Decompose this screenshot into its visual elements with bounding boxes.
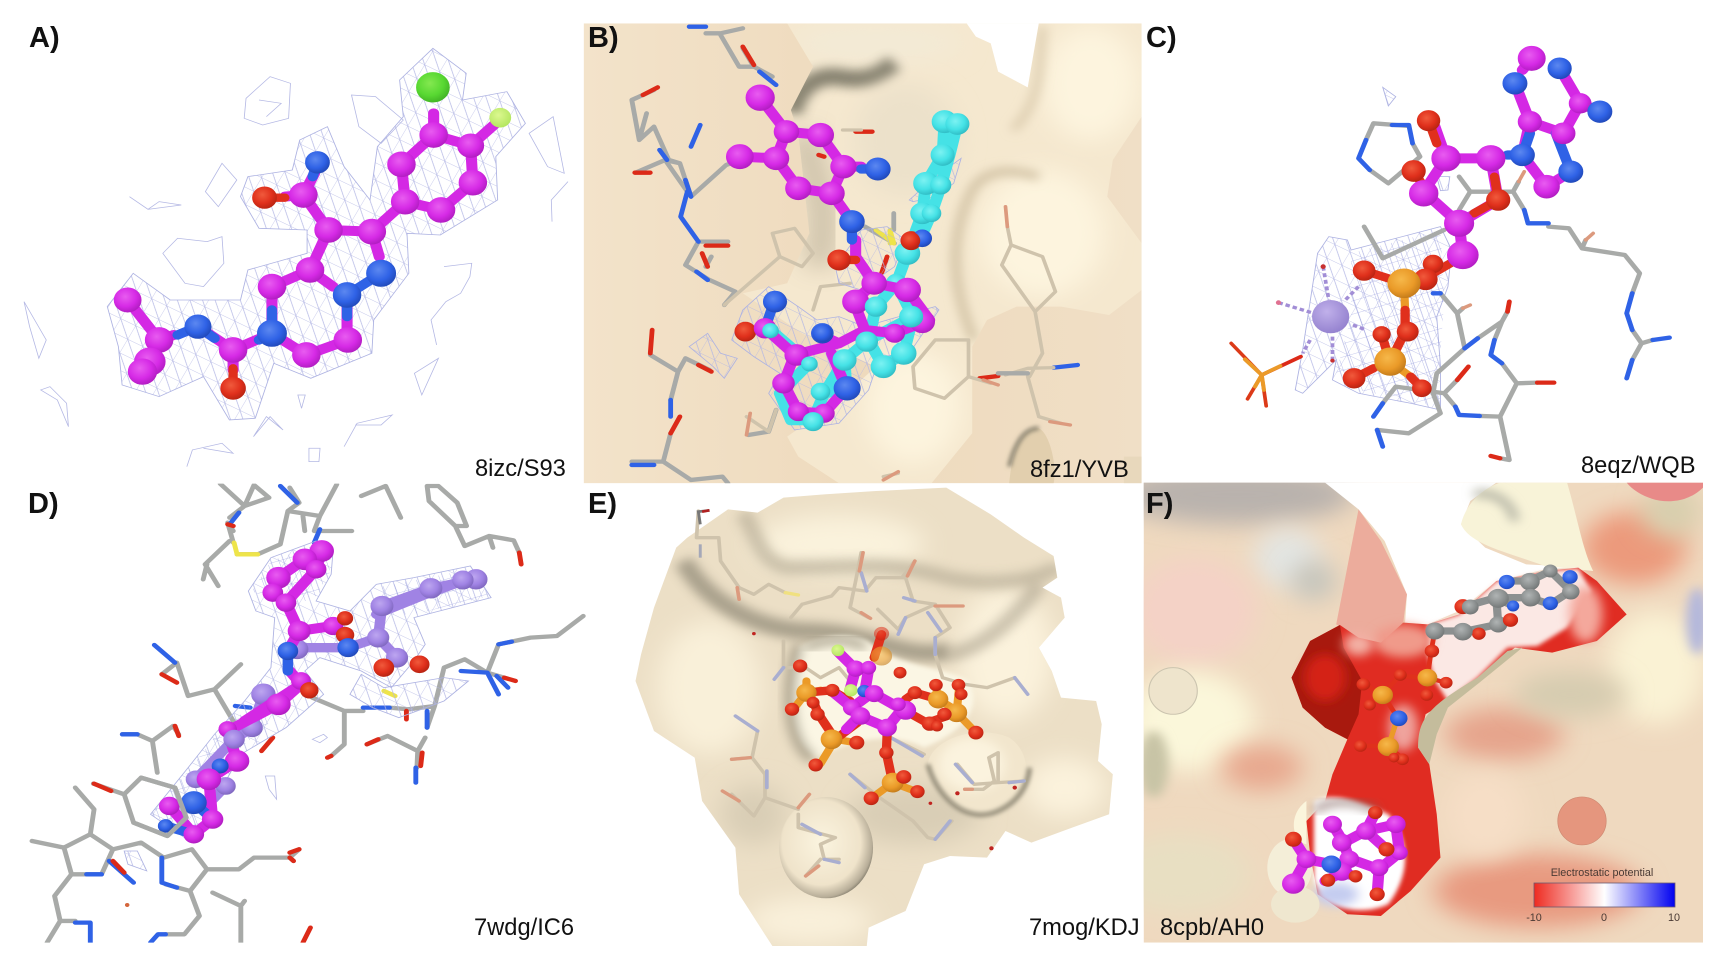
panel caption E: 7mog/KDJ bbox=[1029, 915, 1140, 941]
white pocket base bbox=[1314, 797, 1405, 910]
panel label D: D) bbox=[28, 488, 59, 520]
panel C: 8eqz/WQB nucleotide with metal bbox=[1146, 22, 1696, 479]
panel B: 8fz1/YVB overlay in surface pocket bbox=[580, 20, 1146, 487]
density mesh B bbox=[689, 158, 961, 430]
density mesh A bbox=[24, 48, 568, 467]
ligand C bbox=[1403, 47, 1611, 268]
cyan ligand front atoms B bbox=[764, 231, 930, 430]
panel label A: A) bbox=[29, 22, 60, 54]
electrostatic potential legend: -10 bbox=[1526, 912, 1542, 924]
density mesh D bbox=[124, 541, 491, 871]
blown-out gap behind ligand bbox=[1325, 483, 1578, 624]
ligand E bbox=[786, 628, 983, 804]
water dots E bbox=[752, 632, 1017, 850]
phosphate and metal C bbox=[1276, 256, 1459, 396]
ligand atoms A bbox=[115, 74, 509, 398]
free phosphate C bbox=[1231, 343, 1301, 406]
electrostatic surface F bbox=[1144, 482, 1703, 942]
panel caption F: 8cpb/AH0 bbox=[1160, 915, 1264, 941]
panel F: 8cpb/AH0 electrostatic surface bbox=[1144, 482, 1703, 942]
panel label E: E) bbox=[588, 488, 617, 520]
panel label F: F) bbox=[1146, 488, 1173, 520]
panel caption B: 8fz1/YVB bbox=[1030, 457, 1129, 483]
background wall B bbox=[584, 23, 1142, 483]
panel E: 7mog/KDJ in surface pocket bbox=[588, 488, 1140, 946]
magenta ligand D bbox=[125, 542, 428, 907]
red pocket bbox=[1292, 568, 1627, 916]
panel caption C: 8eqz/WQB bbox=[1581, 453, 1696, 479]
panel label C: C) bbox=[1146, 22, 1177, 54]
panel label B: B) bbox=[588, 22, 619, 54]
molecular surface B bbox=[744, 24, 1142, 484]
magenta ligand F bbox=[1283, 807, 1407, 900]
panel D: 7wdg/IC6 two ligand copies in density bbox=[28, 484, 583, 943]
electrostatic potential legend: Electrostatic potential bbox=[1551, 867, 1653, 879]
density mesh C bbox=[1295, 87, 1452, 410]
molecular surface E bbox=[636, 488, 1113, 946]
ATP-like ligand F bbox=[1355, 565, 1579, 764]
electrostatic potential legend: 10 bbox=[1668, 912, 1680, 924]
electrostatic potential legend: 0 bbox=[1601, 912, 1607, 924]
protein sticks C bbox=[1359, 123, 1669, 460]
protein sticks D bbox=[32, 484, 583, 943]
panel caption D: 7wdg/IC6 bbox=[474, 915, 574, 941]
protein sticks B bbox=[632, 27, 1078, 483]
protein sticks E bbox=[697, 510, 1028, 876]
electrostatic potential legend bbox=[1526, 867, 1680, 924]
purple ligand D bbox=[187, 571, 486, 809]
magenta ligand B bbox=[728, 86, 933, 421]
panel A: 8izc/S93 ligand in density bbox=[24, 22, 568, 482]
panel caption A: 8izc/S93 bbox=[475, 456, 566, 482]
cyan ligand B bbox=[771, 112, 968, 420]
ligand bonds A bbox=[128, 113, 496, 372]
